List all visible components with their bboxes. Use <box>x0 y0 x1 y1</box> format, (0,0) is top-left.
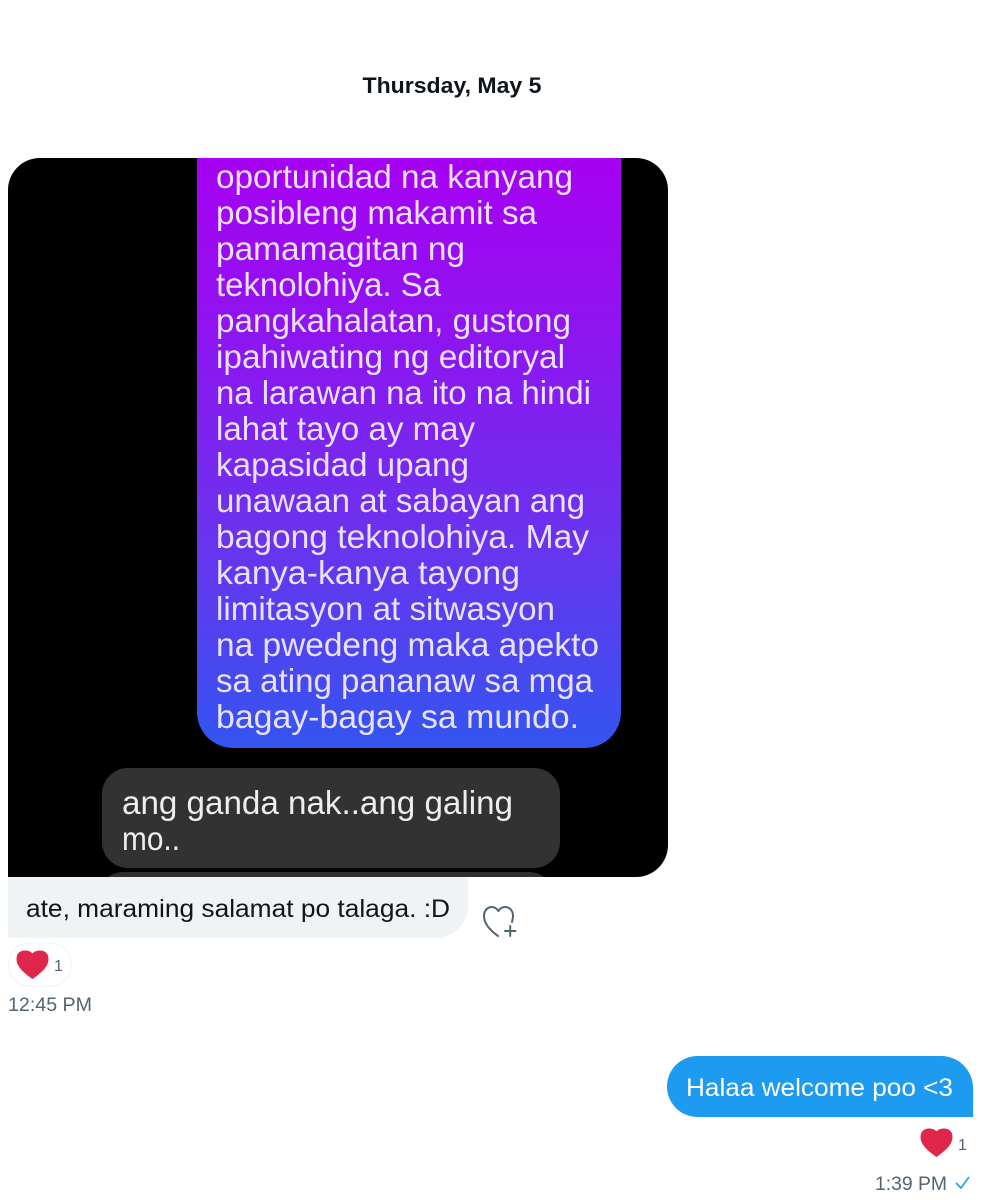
dark reply bubble: mo.. <box>122 820 180 857</box>
panel: screenshot of chat <box>8 150 668 902</box>
gradient message bubble: bagong teknolohiya. May <box>216 518 590 555</box>
icon: red heart <box>16 950 48 979</box>
date heading: Thursday, May 5 <box>362 73 542 98</box>
gradient message bubble: na larawan na ito na hindi <box>216 374 591 411</box>
gradient message bubble: posibleng makamit sa <box>216 194 538 231</box>
gradient message bubble: sa ating pananaw sa mga <box>216 662 594 699</box>
received message bubble <box>8 877 468 938</box>
gradient message bubble: oportunidad na kanyang <box>216 158 573 195</box>
received message bubble: ate, maraming salamat po talaga. :D <box>26 895 450 923</box>
gradient message bubble: teknolohiya. Sa <box>216 266 442 303</box>
gradient message bubble: ipahiwating ng editoryal <box>216 338 565 375</box>
gradient message bubble: bagay-bagay sa mundo. <box>216 698 579 735</box>
icon: add reaction heart <box>484 907 516 936</box>
dark reply bubble: ang ganda nak..ang galing <box>122 784 513 821</box>
gradient message bubble <box>102 150 621 902</box>
timestamp received: 12:45 PM <box>8 994 92 1016</box>
gradient message bubble: na pwedeng maka apekto <box>216 626 599 663</box>
gradient message bubble: pangkahalatan, gustong <box>216 302 571 339</box>
icon: delivered check <box>956 1177 969 1188</box>
gradient message bubble: pamamagitan ng <box>216 230 465 267</box>
gradient message bubble: kanya-kanya tayong <box>216 554 520 591</box>
reaction pill with heart <box>8 943 72 986</box>
sent message bubble: Halaa welcome poo <3 <box>686 1074 953 1102</box>
gradient message bubble: lahat tayo ay may <box>216 410 475 447</box>
gradient message bubble: kapasidad upang <box>216 446 469 483</box>
sent reaction heart and count <box>920 1128 967 1157</box>
sent reaction heart and count: 1 <box>958 1137 967 1154</box>
gradient message bubble: unawaan at sabayan ang <box>216 482 585 519</box>
sent message bubble <box>667 1056 973 1117</box>
timestamp sent: 1:39 PM <box>875 1173 947 1195</box>
reaction pill with heart: 1 <box>54 958 63 975</box>
gradient message bubble: limitasyon at sitwasyon <box>216 590 555 627</box>
dark reply bubble <box>102 768 560 868</box>
